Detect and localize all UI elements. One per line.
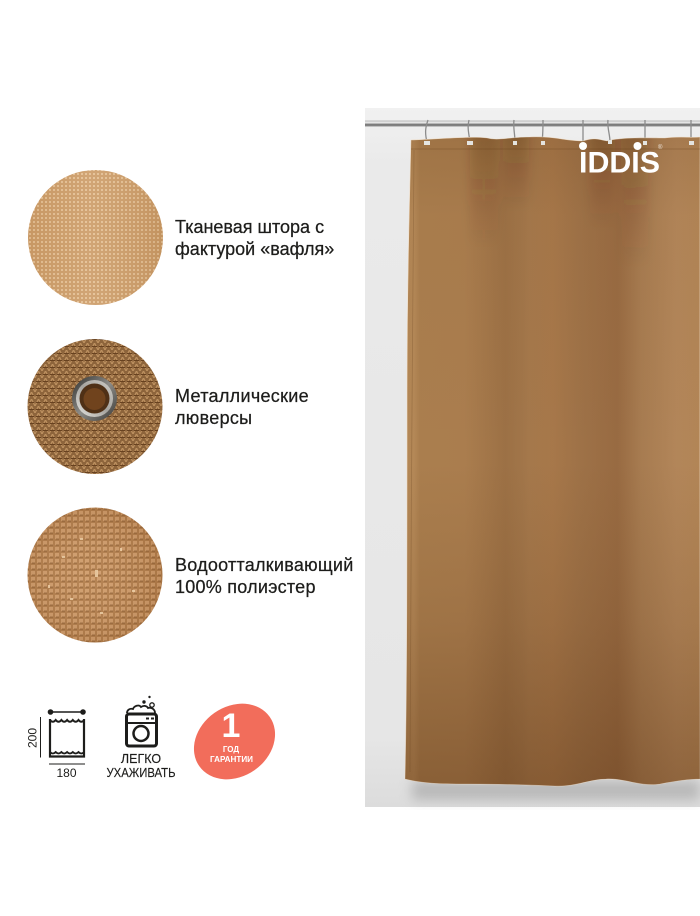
curtain side hem (410, 150, 414, 772)
icon: curtain dimensions: 180 (56, 766, 77, 780)
swatch: water repellent polyester (28, 508, 162, 642)
eyelet ring (72, 376, 117, 421)
text: waffle fabric: фактурой «вафля» (175, 239, 334, 259)
label: easy care: ЛЕГКО (121, 752, 161, 766)
curtain top folds (467, 137, 651, 226)
text: water repellent polyester: 100% полиэстер (175, 577, 316, 597)
badge: 1 year warranty: ГАРАНТИИ (210, 755, 253, 764)
product photo backdrop (365, 108, 700, 807)
swatch: waffle fabric (28, 170, 163, 305)
logo: IDDIS: IDDIS (579, 146, 660, 180)
badge: 1 year warranty (179, 688, 290, 795)
text: waffle fabric (175, 217, 334, 260)
icon: washing machine (126, 696, 157, 746)
curtain grommets (424, 140, 694, 145)
swatch: metal eyelet (28, 339, 162, 474)
label: easy care: УХАЖИВАТЬ (106, 766, 176, 780)
logo: IDDIS: ® (658, 144, 663, 151)
icon: curtain dimensions (26, 709, 86, 780)
badge: 1 year warranty: ГОД (223, 745, 239, 754)
text: metal eyelets (174, 386, 309, 428)
badge: 1 year warranty: 1 (222, 707, 240, 745)
text: metal eyelets: Металлические (175, 386, 309, 406)
curtain shadow (412, 780, 700, 800)
curtain hooks (426, 120, 691, 142)
curtain (405, 130, 700, 786)
text: waffle fabric: Тканевая штора с (175, 217, 324, 237)
label: easy care (106, 752, 176, 780)
text: water repellent polyester (175, 555, 354, 598)
icon: curtain dimensions: 200 (26, 728, 40, 748)
text: water repellent polyester: Водоотталкивающий (175, 555, 354, 575)
curtain rod (365, 120, 700, 126)
text: metal eyelets: люверсы (175, 408, 252, 428)
